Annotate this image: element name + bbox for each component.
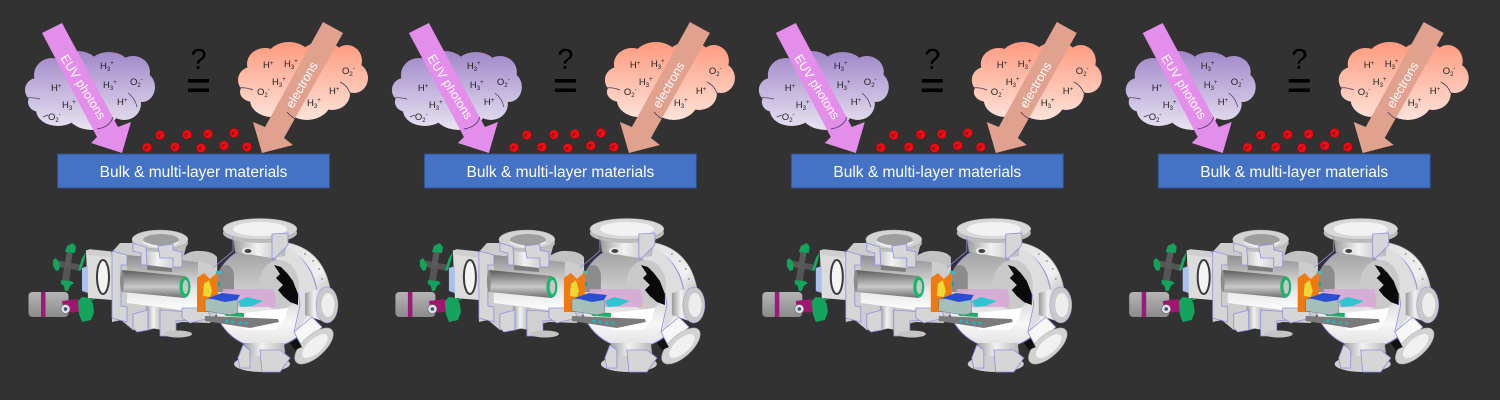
ion and label text: H [484, 97, 491, 108]
ion and label text: - [234, 129, 236, 135]
ion and label text: H [103, 80, 110, 91]
diagram artwork: clouds, arrows, electrons, materials bar [1126, 22, 1469, 188]
ion and label text: ? [924, 44, 940, 76]
ion and label text: + [684, 98, 688, 104]
ion and label text: 3 [1025, 65, 1029, 71]
ion and label text: H [418, 83, 425, 94]
ion and label text: H [1152, 83, 1159, 94]
ion and label text: + [806, 100, 810, 106]
ion and label text: O [1149, 112, 1156, 123]
ion and label text: 3 [291, 65, 295, 71]
ion and label text: - [921, 130, 923, 136]
ion and label text: + [1225, 98, 1229, 104]
ion and label text: - [187, 130, 189, 136]
ion and label text: H [329, 86, 336, 97]
ion and label text: H [51, 83, 58, 94]
ion and label text: H [263, 60, 270, 71]
ion and label text: - [1002, 87, 1004, 93]
ion and label text: H [1163, 100, 1170, 111]
ion and label text: e [1273, 145, 1276, 151]
ion and label text: - [614, 143, 616, 149]
ion and label text: O [1358, 87, 1365, 98]
ion and label text: + [637, 61, 641, 67]
ion and label text: O [415, 112, 422, 123]
ion and label text: - [208, 130, 210, 136]
ion and label text: e [244, 145, 247, 151]
ion and label text: - [1309, 130, 1311, 136]
ion and label text: 2 [1365, 93, 1369, 99]
ion and label text: + [661, 59, 665, 65]
ion and label text: Bulk & multi-layer materials [1200, 164, 1388, 181]
ion and label text: 3 [841, 67, 845, 73]
ion and label text: - [1453, 66, 1455, 72]
ion and label text: H [1364, 60, 1371, 71]
ion and label text: + [1437, 87, 1441, 93]
ion and label text: - [508, 77, 510, 83]
ion and label text: H [837, 80, 844, 91]
ion and label text: 3 [107, 67, 111, 73]
ion and label text: H [1063, 86, 1070, 97]
ion and label text: + [270, 61, 274, 67]
ion and label text: H [696, 86, 703, 97]
ion and label text: - [542, 143, 544, 149]
ion and label text: + [792, 84, 796, 90]
ion and label text: + [491, 98, 495, 104]
ion and label text: H [997, 60, 1004, 71]
ion and label text: + [124, 98, 128, 104]
ion and label text: - [141, 77, 143, 83]
ion and label text: - [568, 144, 570, 150]
ion and label text: + [649, 77, 653, 83]
ion and label text: + [1214, 80, 1218, 86]
vacuum chamber cutaway [395, 218, 706, 372]
ion and label text [415, 44, 722, 181]
ion and label text: + [110, 61, 114, 67]
ion and label text: 2 [998, 93, 1002, 99]
ion and label text: - [894, 131, 896, 137]
ion and label text: + [1070, 87, 1074, 93]
ion and label text: e [965, 131, 968, 137]
ion and label text: + [1211, 61, 1215, 67]
ion and label text: 3 [436, 106, 440, 112]
ion and label text: - [1261, 131, 1263, 137]
ion and label text: H [796, 100, 803, 111]
ion and label text: 3 [844, 86, 848, 92]
ion and label text: e [222, 144, 224, 150]
ion and label text: - [981, 143, 983, 149]
ion and label text: 3 [803, 106, 807, 112]
ion and label text: + [425, 84, 429, 90]
ion and label text: H [1218, 97, 1225, 108]
ion and label text: - [942, 130, 944, 136]
ion and label text: O [1231, 77, 1238, 88]
ion and label text: H [1006, 77, 1013, 88]
ion and label text: 3 [1170, 106, 1174, 112]
ion and label text: 3 [110, 86, 114, 92]
ion and label text: e [878, 146, 881, 152]
ion and label text: 2 [1156, 118, 1160, 124]
ion and label text: e [184, 132, 187, 138]
ion and label text: + [1173, 100, 1177, 106]
ion and label text: + [294, 59, 298, 65]
ion and label text: 3 [69, 106, 73, 112]
ion and label text: + [1371, 61, 1375, 67]
ion and label text: O [342, 66, 349, 77]
vacuum chamber cutaway [28, 218, 339, 372]
ion and label text: - [1159, 112, 1161, 118]
ion and label text: EUV photons [791, 52, 842, 122]
ion and label text: 2 [349, 72, 353, 78]
ion and label text: 2 [789, 118, 793, 124]
ion and label text: - [1368, 87, 1370, 93]
vacuum chamber cutaway [1129, 218, 1440, 372]
ion and label text: H [639, 77, 646, 88]
ion and label text: 3 [1380, 83, 1384, 89]
ion and label text: + [317, 98, 321, 104]
ion and label text: - [909, 143, 911, 149]
ion and label text: e [588, 144, 591, 150]
ion and label text: 3 [1415, 104, 1419, 110]
ion and label text: H [785, 83, 792, 94]
ion and label text: H [1430, 86, 1437, 97]
ion and label text: - [268, 87, 270, 93]
ion and label text: H [630, 60, 637, 71]
ion and label text: O [48, 112, 55, 123]
ion and label text: - [426, 112, 428, 118]
ion and label text: - [1248, 144, 1250, 150]
ion and label text: + [1418, 98, 1422, 104]
ion and label text: + [858, 98, 862, 104]
ion and label text: 2 [1450, 72, 1454, 78]
ion and label text: H [1204, 80, 1211, 91]
ion and label text: - [635, 87, 637, 93]
ion and label text: 3 [1211, 86, 1215, 92]
ion and label text: electrons [283, 60, 321, 110]
ion and label text: O [130, 77, 137, 88]
ion and label text: H [674, 98, 681, 109]
ion and label text: H [100, 61, 107, 72]
ion and label text: - [1335, 129, 1337, 135]
ion and label text: O [991, 87, 998, 98]
ion and label text: H [117, 97, 124, 108]
ion and label text: e [891, 133, 894, 139]
ion and label text: - [968, 129, 970, 135]
ion and label text: - [514, 144, 516, 150]
ion and label text: e [1245, 146, 1248, 152]
ion and label text: e [1332, 131, 1335, 137]
ion and label text: H [1373, 77, 1380, 88]
ion and label text: 3 [1208, 67, 1212, 73]
ion and label text: - [958, 142, 960, 148]
ion and label text: + [703, 87, 707, 93]
ion and label text: O [624, 87, 631, 98]
ion and label text: e [572, 132, 575, 138]
ion and label text: O [782, 112, 789, 123]
ion and label text: - [147, 144, 149, 150]
ion and label text: - [793, 112, 795, 118]
ion and label text: - [1302, 144, 1304, 150]
ion and label text: e [511, 146, 514, 152]
diagram artwork: clouds, arrows, electrons, materials bar [25, 22, 368, 188]
ion and label text: 2 [716, 72, 720, 78]
ion and label text: electrons [1017, 60, 1055, 110]
ion and label text: e [978, 145, 981, 151]
ion and label text: 2 [422, 118, 426, 124]
ion and label text: H [429, 100, 436, 111]
ion and label text: e [1322, 144, 1325, 150]
ion and label text: ? [557, 44, 574, 76]
ion and label text: e [1285, 132, 1288, 138]
ion and label text: H [1018, 59, 1025, 70]
panel: scene 2 [392, 22, 735, 372]
ion and label text: + [844, 61, 848, 67]
ion and label text: 2 [631, 93, 635, 99]
diagram artwork: clouds, arrows, electrons, materials bar [392, 22, 735, 188]
ion and label text: Bulk & multi-layer materials [467, 164, 655, 181]
ion and label text: EUV photons [424, 52, 475, 122]
ion and label text: H [272, 77, 279, 88]
ion and label text: H [467, 61, 474, 72]
ion and label text: + [1395, 59, 1399, 65]
ion and label text: Bulk & multi-layer materials [100, 164, 288, 181]
ion and label text: + [1051, 98, 1055, 104]
ion and label text: e [144, 146, 147, 152]
ion and label text: + [477, 61, 481, 67]
vacuum chamber cutaway [762, 218, 1073, 372]
ion and label text: + [282, 77, 286, 83]
panel: scene 1 [25, 22, 368, 372]
ion and label text: O [1076, 66, 1083, 77]
ion and label text: 2 [1238, 83, 1242, 89]
ion and label text: 3 [474, 67, 478, 73]
ion and label text: - [160, 131, 162, 137]
ion and label text: - [1087, 66, 1089, 72]
ion and label text: 2 [55, 118, 59, 124]
ion and label text: electrons [1384, 60, 1421, 110]
ion and label text: 3 [681, 104, 685, 110]
ion and label text: e [551, 132, 554, 138]
ion and label text: e [918, 132, 921, 138]
ion and label text: + [480, 80, 484, 86]
ion and label text: - [247, 143, 249, 149]
ion and label text: 2 [264, 93, 268, 99]
ion and label text: + [113, 80, 117, 86]
ion and label text: e [939, 132, 942, 138]
ion and label text: - [591, 142, 593, 148]
ion and label text: e [1345, 145, 1348, 151]
ion and label text: O [497, 77, 504, 88]
ion and label text: H [1385, 59, 1392, 70]
ion and label text: e [198, 146, 201, 152]
ion and label text: 3 [279, 83, 283, 89]
panel: scene 3 [759, 22, 1102, 372]
ion and label text: 2 [504, 83, 508, 89]
ion and label text: H [284, 59, 291, 70]
ion and label text: e [906, 145, 909, 151]
ion and label text: - [935, 144, 937, 150]
ion and label text: - [1288, 130, 1290, 136]
ion and label text: + [1016, 77, 1020, 83]
ion and label text: e [232, 131, 234, 137]
ion and label text: 3 [646, 83, 650, 89]
ion and label text: - [875, 77, 877, 83]
ion and label text: e [1306, 132, 1309, 138]
ion and label text: e [206, 132, 208, 138]
ion and label text: 3 [314, 104, 318, 110]
ion and label text: - [527, 131, 529, 137]
ion and label text: e [1299, 146, 1302, 152]
ion and label text: + [58, 84, 62, 90]
ion and label text: e [565, 146, 568, 152]
ion and label text: e [158, 133, 160, 139]
ion and label text: e [611, 145, 614, 151]
ion and label text: - [554, 130, 556, 136]
ion and label text: H [851, 97, 858, 108]
ion and label text: 3 [658, 65, 662, 71]
ion and label text: 3 [1392, 65, 1396, 71]
ion and label text: H [62, 100, 69, 111]
ion and label text: H [834, 61, 841, 72]
ion and label text: - [1276, 143, 1278, 149]
ion and label text: O [257, 87, 264, 98]
ion and label text: + [847, 80, 851, 86]
ion and label text: + [336, 87, 340, 93]
ion and label text: Bulk & multi-layer materials [833, 164, 1021, 181]
ion and label text: H [1041, 98, 1048, 109]
ion and label text: + [439, 100, 443, 106]
ion and label text: 2 [1083, 72, 1087, 78]
ion and label text: EUV photons [1158, 52, 1209, 122]
ion and label text: O [709, 66, 716, 77]
ion and label text: e [932, 146, 935, 152]
ion and label text: e [172, 145, 175, 151]
ion and label text: - [59, 112, 61, 118]
ion and label text: 2 [137, 83, 141, 89]
ion and label text: H [1201, 61, 1208, 72]
ion and label text: electrons [650, 60, 688, 110]
ion and label text: - [601, 129, 603, 135]
ion and label text: 3 [477, 86, 481, 92]
ion and label text: - [1241, 77, 1243, 83]
ion and label text: 3 [1048, 104, 1052, 110]
ion and label text: + [1383, 77, 1387, 83]
ion and label text: e [598, 131, 601, 137]
ion and label text: ? [1291, 44, 1307, 76]
ion and label text: H [651, 59, 658, 70]
ion and label text: EUV photons [58, 52, 108, 122]
ion and label text: H [1408, 98, 1415, 109]
ion and label text: - [1325, 142, 1327, 148]
ion and label text: + [1028, 59, 1032, 65]
ion and label text: - [881, 144, 883, 150]
ion and label text: - [353, 66, 355, 72]
ion and label text: + [1159, 84, 1163, 90]
panel: scene 4 [1126, 22, 1469, 372]
ion and label text: 3 [1013, 83, 1017, 89]
ion and label text: ? [190, 44, 207, 76]
ion and label text: e [539, 145, 542, 151]
ion and label text: e [1258, 133, 1261, 139]
diagram artwork: clouds, arrows, electrons, materials bar [759, 22, 1102, 188]
ion and label text: H [470, 80, 477, 91]
ion and label text: - [575, 130, 577, 136]
ion and label text: O [864, 77, 871, 88]
ion and label text: - [224, 142, 226, 148]
ion and label text: + [72, 100, 76, 106]
ion and label text [782, 44, 1089, 181]
ion and label text: H [307, 98, 314, 109]
ion and label text: e [524, 133, 527, 139]
ion and label text: O [1443, 66, 1450, 77]
ion and label text: 2 [871, 83, 875, 89]
ion and label text: - [1348, 143, 1350, 149]
ion and label text: - [720, 66, 722, 72]
ion and label text: - [201, 144, 203, 150]
ion and label text: + [1004, 61, 1008, 67]
ion and label text: - [175, 143, 177, 149]
ion and label text [1149, 44, 1455, 181]
ion and label text [48, 44, 355, 181]
ion and label text: e [955, 144, 958, 150]
